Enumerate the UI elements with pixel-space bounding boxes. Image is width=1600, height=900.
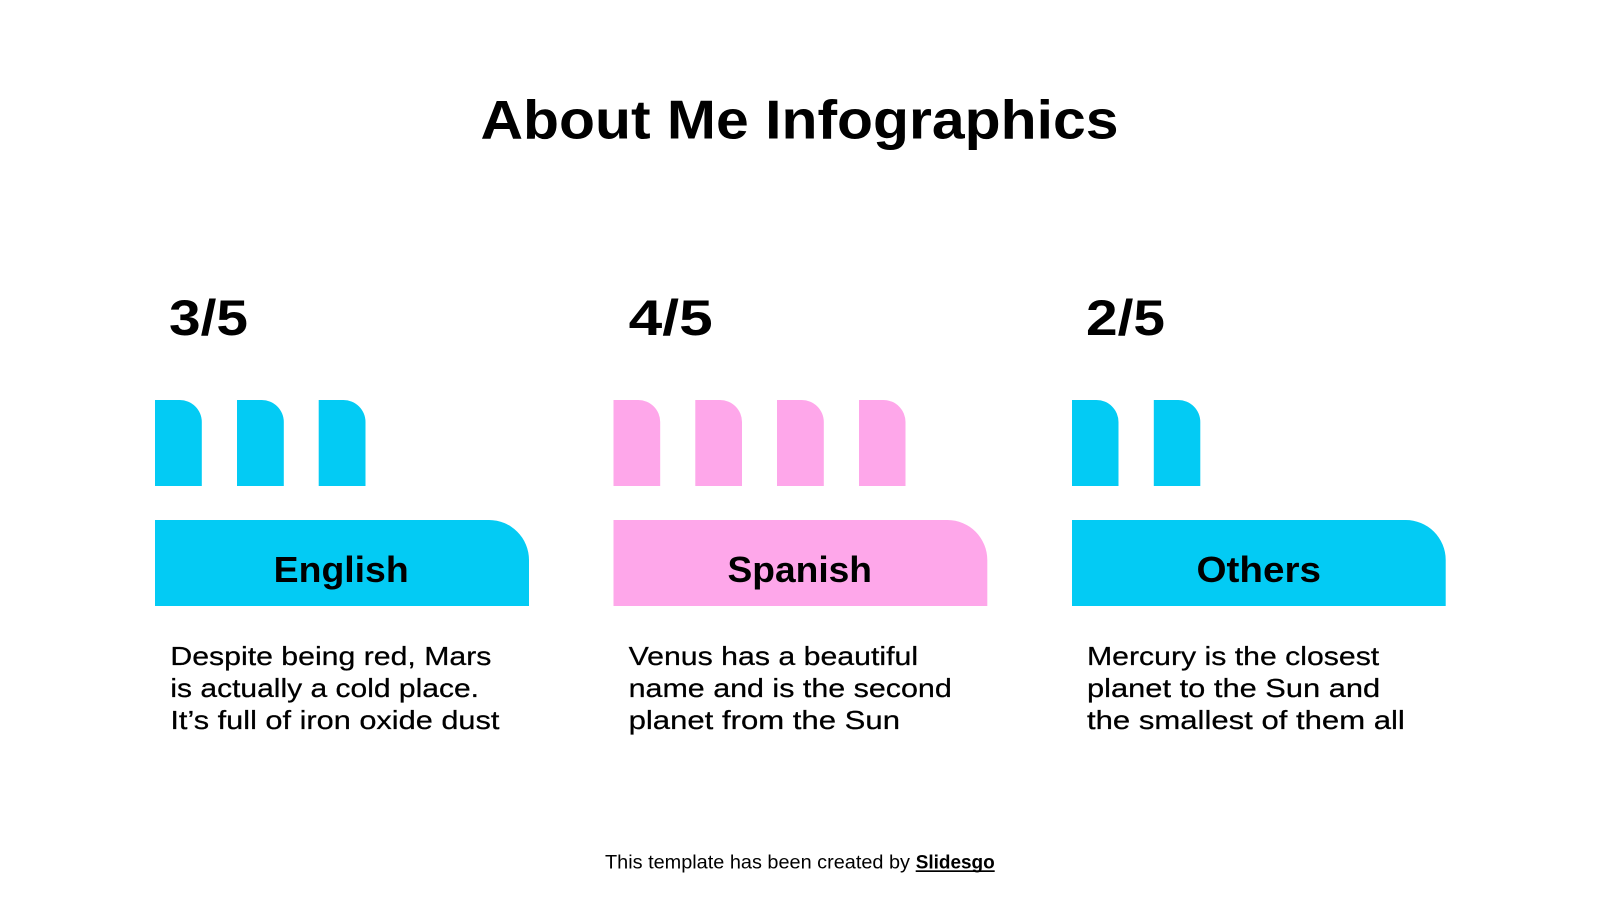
label bar: English bbox=[155, 520, 529, 606]
description: Others: Mercury is the closest bbox=[1087, 641, 1380, 671]
description: Others bbox=[1087, 641, 1405, 735]
description: Spanish: planet from the Sun bbox=[629, 705, 900, 735]
rating tabs: Spanish 4 of 5 bbox=[614, 400, 906, 486]
label bar: Others bbox=[1072, 520, 1446, 606]
description: English: It’s full of iron oxide dust bbox=[170, 705, 500, 735]
label bar: Spanish bbox=[614, 520, 987, 606]
description: Spanish: name and is the second bbox=[629, 673, 952, 703]
rating tabs: Others 2 of 5 bbox=[1072, 400, 1200, 486]
label bar: Spanish: Spanish bbox=[728, 549, 872, 590]
score: Others: 2/5 bbox=[1086, 290, 1165, 346]
description: Spanish bbox=[629, 641, 952, 735]
description: English: is actually a cold place. bbox=[170, 673, 479, 703]
panel: Spanish bbox=[614, 290, 987, 735]
description: Others: the smallest of them all bbox=[1087, 705, 1405, 735]
rating tabs: English 3 of 5 bbox=[155, 400, 366, 486]
label bar: Others: Others bbox=[1196, 549, 1321, 590]
description: English: Despite being red, Mars bbox=[170, 641, 491, 671]
description: Others: planet to the Sun and bbox=[1087, 673, 1380, 703]
panel: English bbox=[155, 290, 529, 735]
panel: Others bbox=[1072, 290, 1446, 735]
score: Spanish: 4/5 bbox=[629, 290, 713, 346]
footer credit: Slidesgo bbox=[916, 852, 995, 873]
label bar: English: English bbox=[274, 549, 409, 590]
title: About Me Infographics bbox=[480, 90, 1118, 150]
description: Spanish: Venus has a beautiful bbox=[629, 641, 918, 671]
score: English: 3/5 bbox=[169, 290, 248, 346]
footer credit: This template has been created by bbox=[605, 852, 911, 873]
description: English bbox=[170, 641, 500, 735]
